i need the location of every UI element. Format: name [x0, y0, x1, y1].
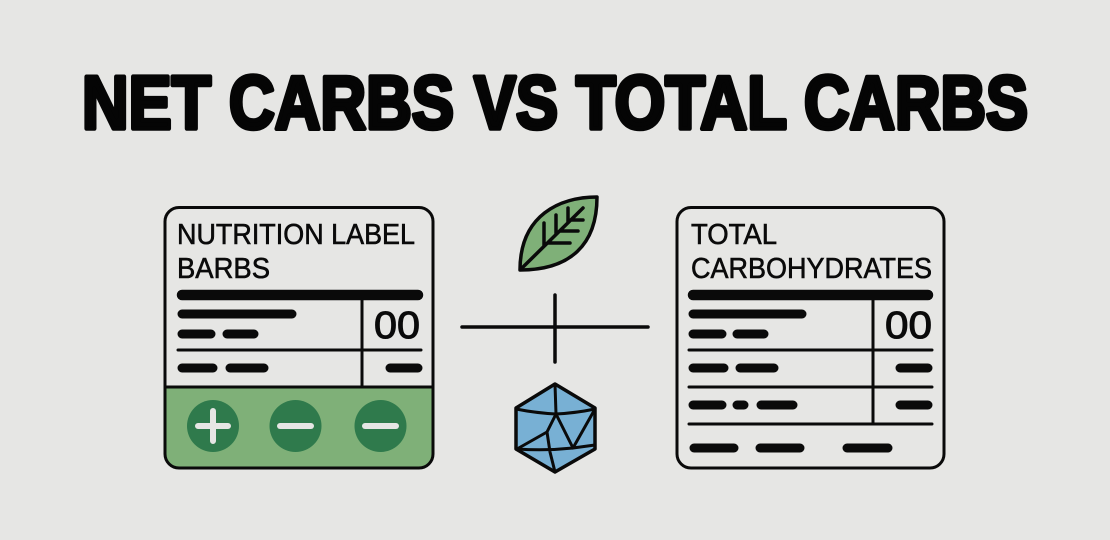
value: 00: 00 — [374, 305, 420, 347]
panel outline — [165, 208, 433, 468]
panel: nutrition label — [165, 208, 433, 468]
plus sign — [462, 295, 648, 362]
value: 00: 00 — [885, 305, 932, 347]
label rows — [165, 295, 433, 387]
panel: total carbohydrates — [677, 208, 944, 468]
label rows — [689, 295, 932, 448]
title: VS — [474, 60, 558, 144]
heading: total carbohydrates: TOTAL — [691, 219, 777, 251]
panel outline — [677, 208, 944, 468]
icon: crystal — [516, 384, 595, 472]
green footer band — [165, 387, 433, 468]
heading: total carbohydrates — [691, 219, 932, 285]
icon: plus circle — [187, 400, 239, 452]
heading: total carbohydrates: CARBOHYDRATES — [691, 253, 932, 285]
heading: nutrition label barbs: NUTRITION LABEL — [177, 219, 415, 251]
heading: nutrition label barbs — [177, 219, 415, 285]
title: CARBS — [804, 60, 1028, 144]
heading: nutrition label barbs: BARBS — [177, 253, 270, 285]
icon: minus circle — [354, 400, 406, 452]
title: CARBS — [229, 60, 454, 144]
icon: leaf — [520, 197, 597, 270]
title: NET — [82, 60, 211, 144]
title — [82, 60, 1028, 144]
title: TOTAL — [576, 60, 787, 144]
icon: minus circle — [270, 400, 322, 452]
